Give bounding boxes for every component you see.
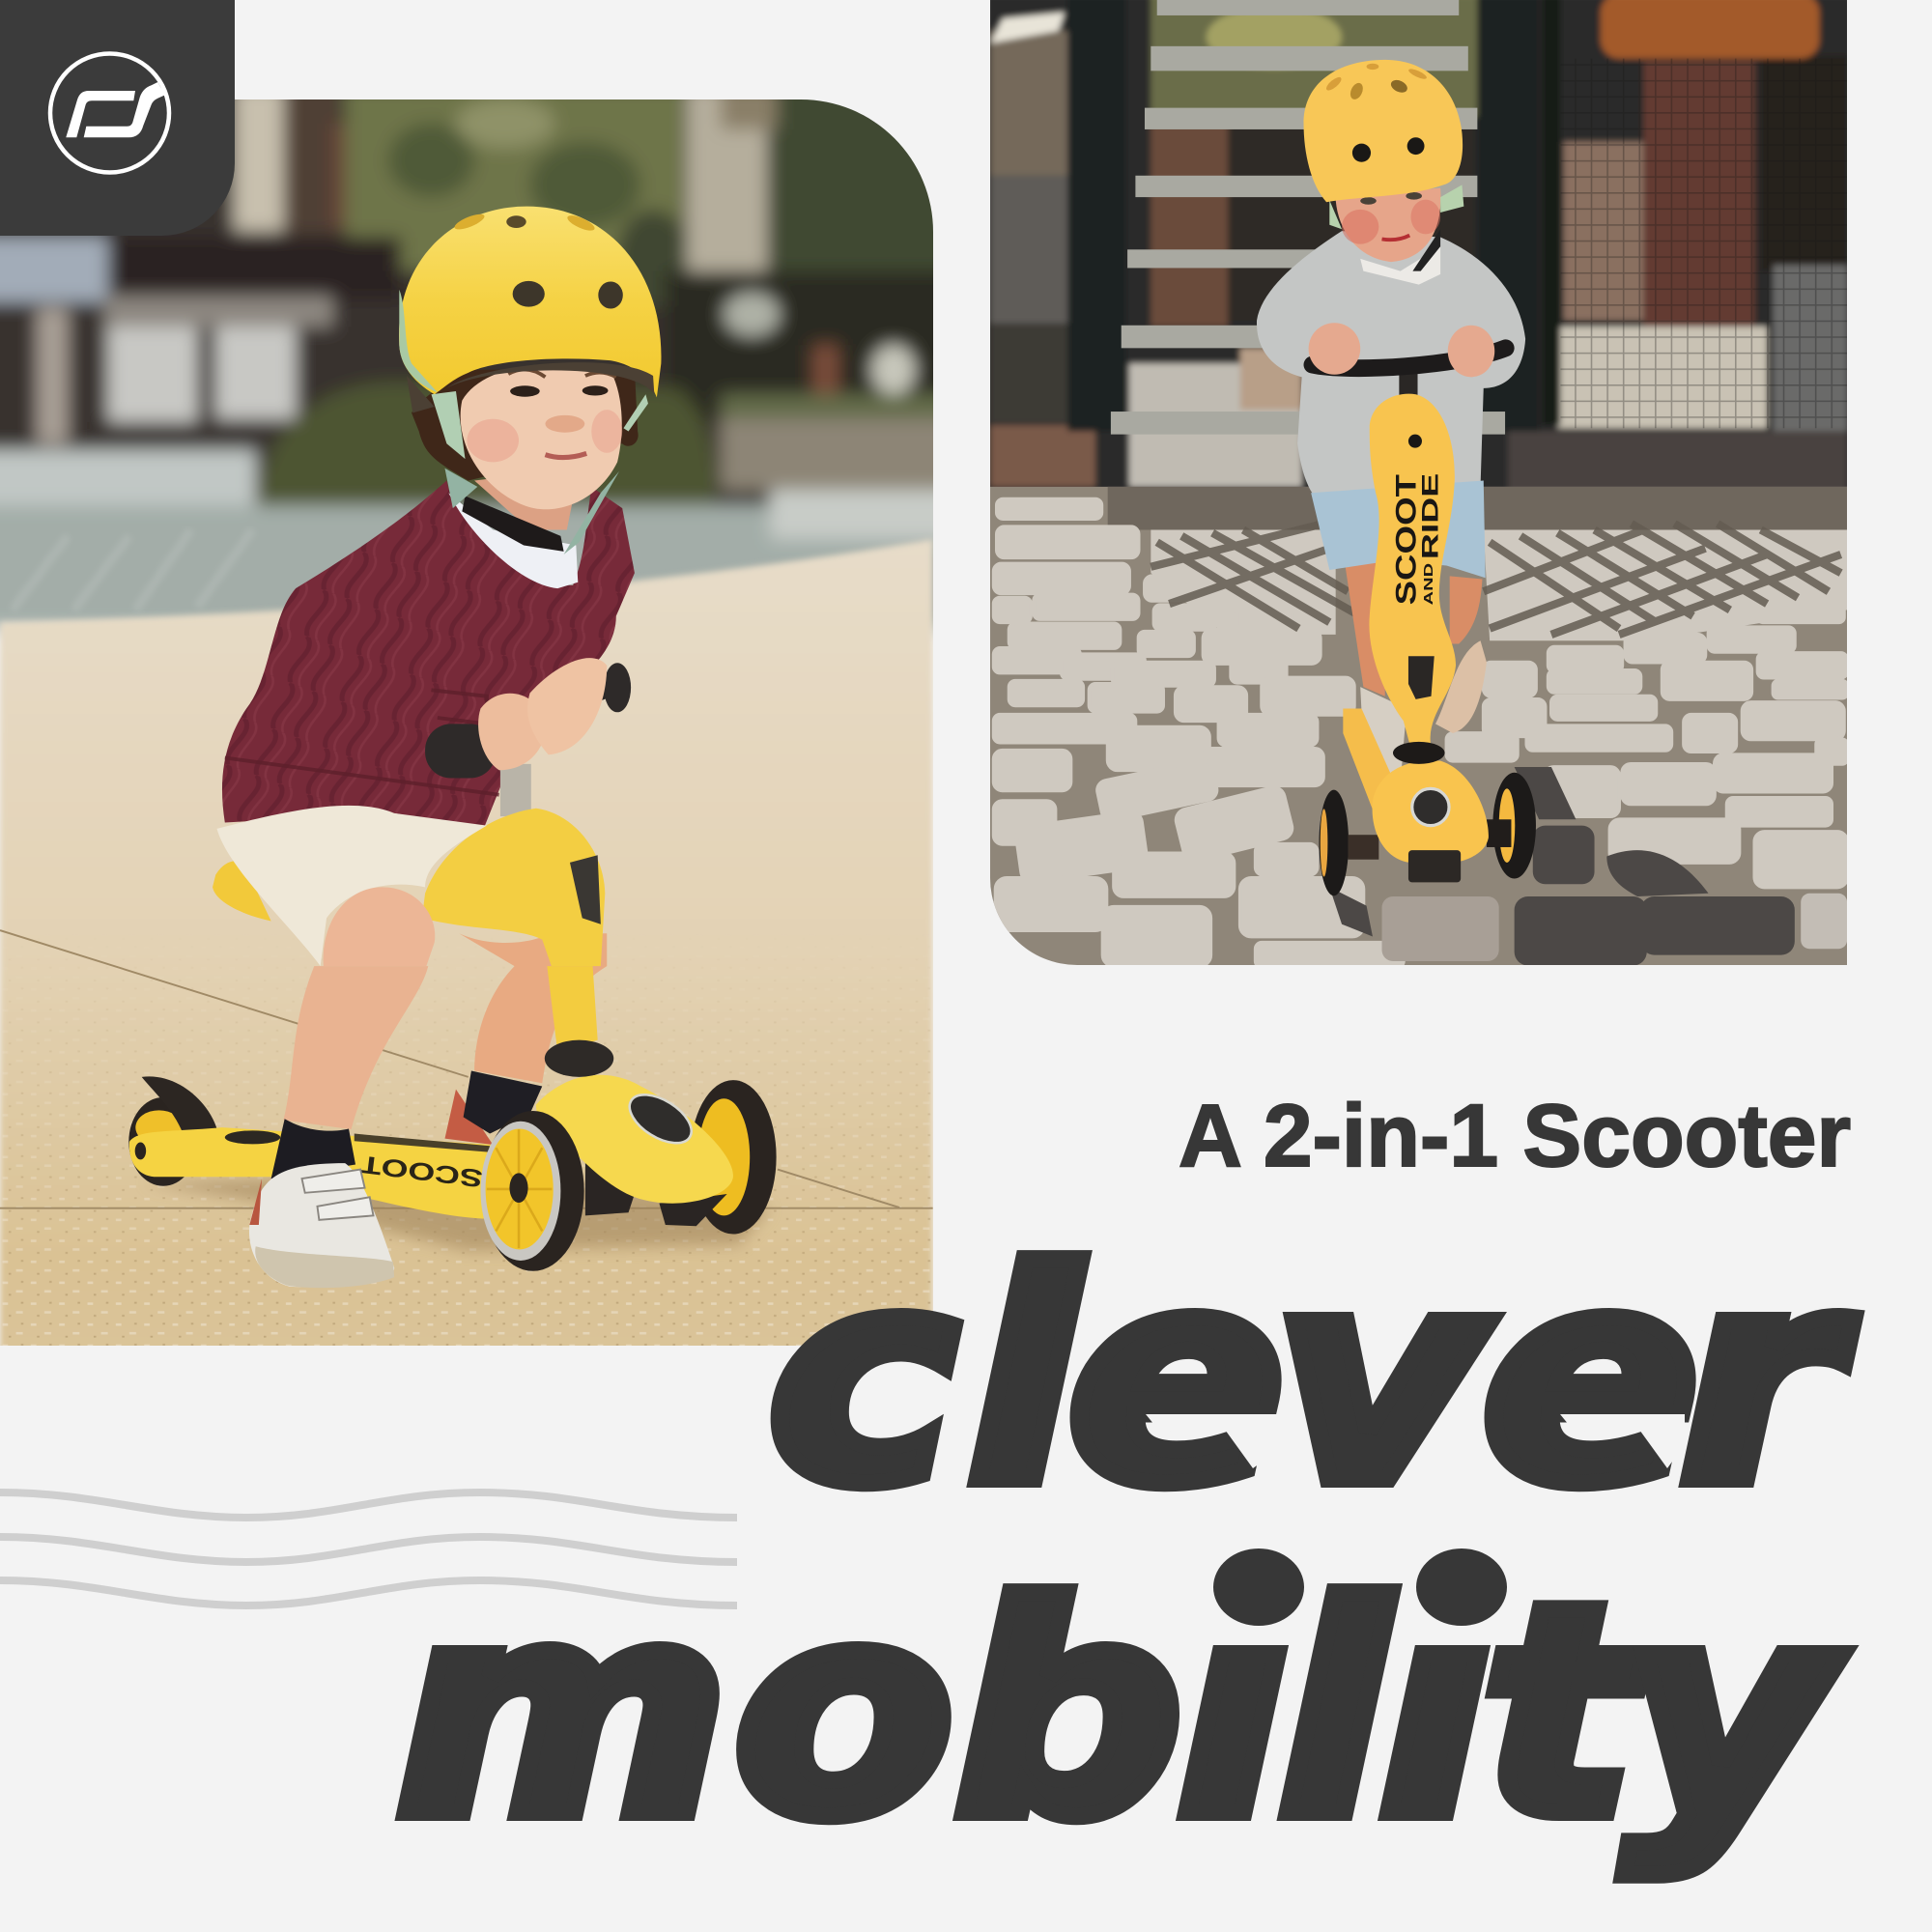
cobblestone ground xyxy=(984,487,1853,974)
collar xyxy=(545,1040,613,1077)
denim shorts xyxy=(1311,480,1486,578)
ground shadow under scooter xyxy=(142,1171,770,1251)
scooter stem with logo text: RIDE xyxy=(1418,473,1444,559)
panel: left photo of child on yellow scooter xyxy=(0,99,933,1346)
front wheel far xyxy=(690,1080,777,1235)
far leg, upper xyxy=(459,933,607,1083)
near shoe xyxy=(249,1163,394,1288)
letter e apertures xyxy=(1146,1414,1685,1468)
heading: mobility: mobility xyxy=(396,1544,1843,1881)
rear wheel and fender xyxy=(128,1076,218,1186)
helmet xyxy=(399,207,661,397)
round i-dots xyxy=(1213,1548,1507,1626)
sunlit lattice shadow on cobbles xyxy=(1151,524,1841,635)
head and helmet xyxy=(1304,60,1463,271)
scooter deck xyxy=(129,1127,493,1219)
scooter stem with logo text xyxy=(1369,394,1456,749)
deck text: SCOOT xyxy=(1391,474,1423,605)
deck lettering, upside down: SCOOT xyxy=(358,1150,484,1192)
helmet, head and torso of child xyxy=(215,207,661,832)
pavement stripes in background xyxy=(15,534,249,606)
left leg and shoe xyxy=(1345,557,1406,783)
photo background: blurred street xyxy=(0,74,961,629)
near leg, upper xyxy=(324,887,435,966)
scooter rear deck xyxy=(1343,708,1397,829)
near leg and sock xyxy=(271,966,428,1179)
icon: round brand logo xyxy=(50,54,169,172)
heading: clever: clever xyxy=(768,1210,1855,1548)
chin strap xyxy=(462,496,564,552)
stem xyxy=(547,966,598,1052)
face xyxy=(461,364,622,509)
i-dot gaps xyxy=(1198,1541,1513,1645)
undercarriage xyxy=(585,1157,727,1226)
scooter seat and rear tail xyxy=(213,809,605,966)
scooter stem with logo text: AND xyxy=(1421,563,1435,605)
scooter front wheels and base xyxy=(1319,742,1536,895)
front wheel near with spokes xyxy=(480,1111,584,1271)
handlebar and hands xyxy=(425,658,631,816)
photo ground: pavement xyxy=(0,537,933,1346)
right leg and shoe xyxy=(1435,576,1487,733)
panel: right photo of child riding scooter on cobblestones xyxy=(984,0,1853,974)
sweater xyxy=(222,480,635,829)
handlebar with hands xyxy=(1309,323,1506,397)
decorative wavy lines xyxy=(0,1492,737,1605)
metal stairs xyxy=(1111,0,1505,435)
sunlit lattice area xyxy=(1151,530,1847,640)
cobblestones, mid-tone xyxy=(1382,896,1499,961)
front body xyxy=(536,1075,733,1204)
cobblestones, light xyxy=(994,499,1847,967)
hair xyxy=(412,370,639,480)
dark shadowed cobbles xyxy=(1329,767,1795,965)
sweatshirt xyxy=(1257,231,1525,496)
subtitle: A 2-in-1 Scooter xyxy=(1179,1087,1851,1185)
sweater cable knit texture xyxy=(215,480,647,832)
neck xyxy=(474,479,572,529)
badge xyxy=(628,1094,693,1144)
photo background: stairs and railings xyxy=(984,0,1853,505)
far shoe and sock xyxy=(444,1070,542,1145)
wire mesh fence xyxy=(1560,59,1847,428)
logo tab xyxy=(0,0,235,236)
shorts xyxy=(217,806,487,966)
white t-shirt collar xyxy=(448,493,578,588)
sweater cuff and hem xyxy=(225,690,499,795)
